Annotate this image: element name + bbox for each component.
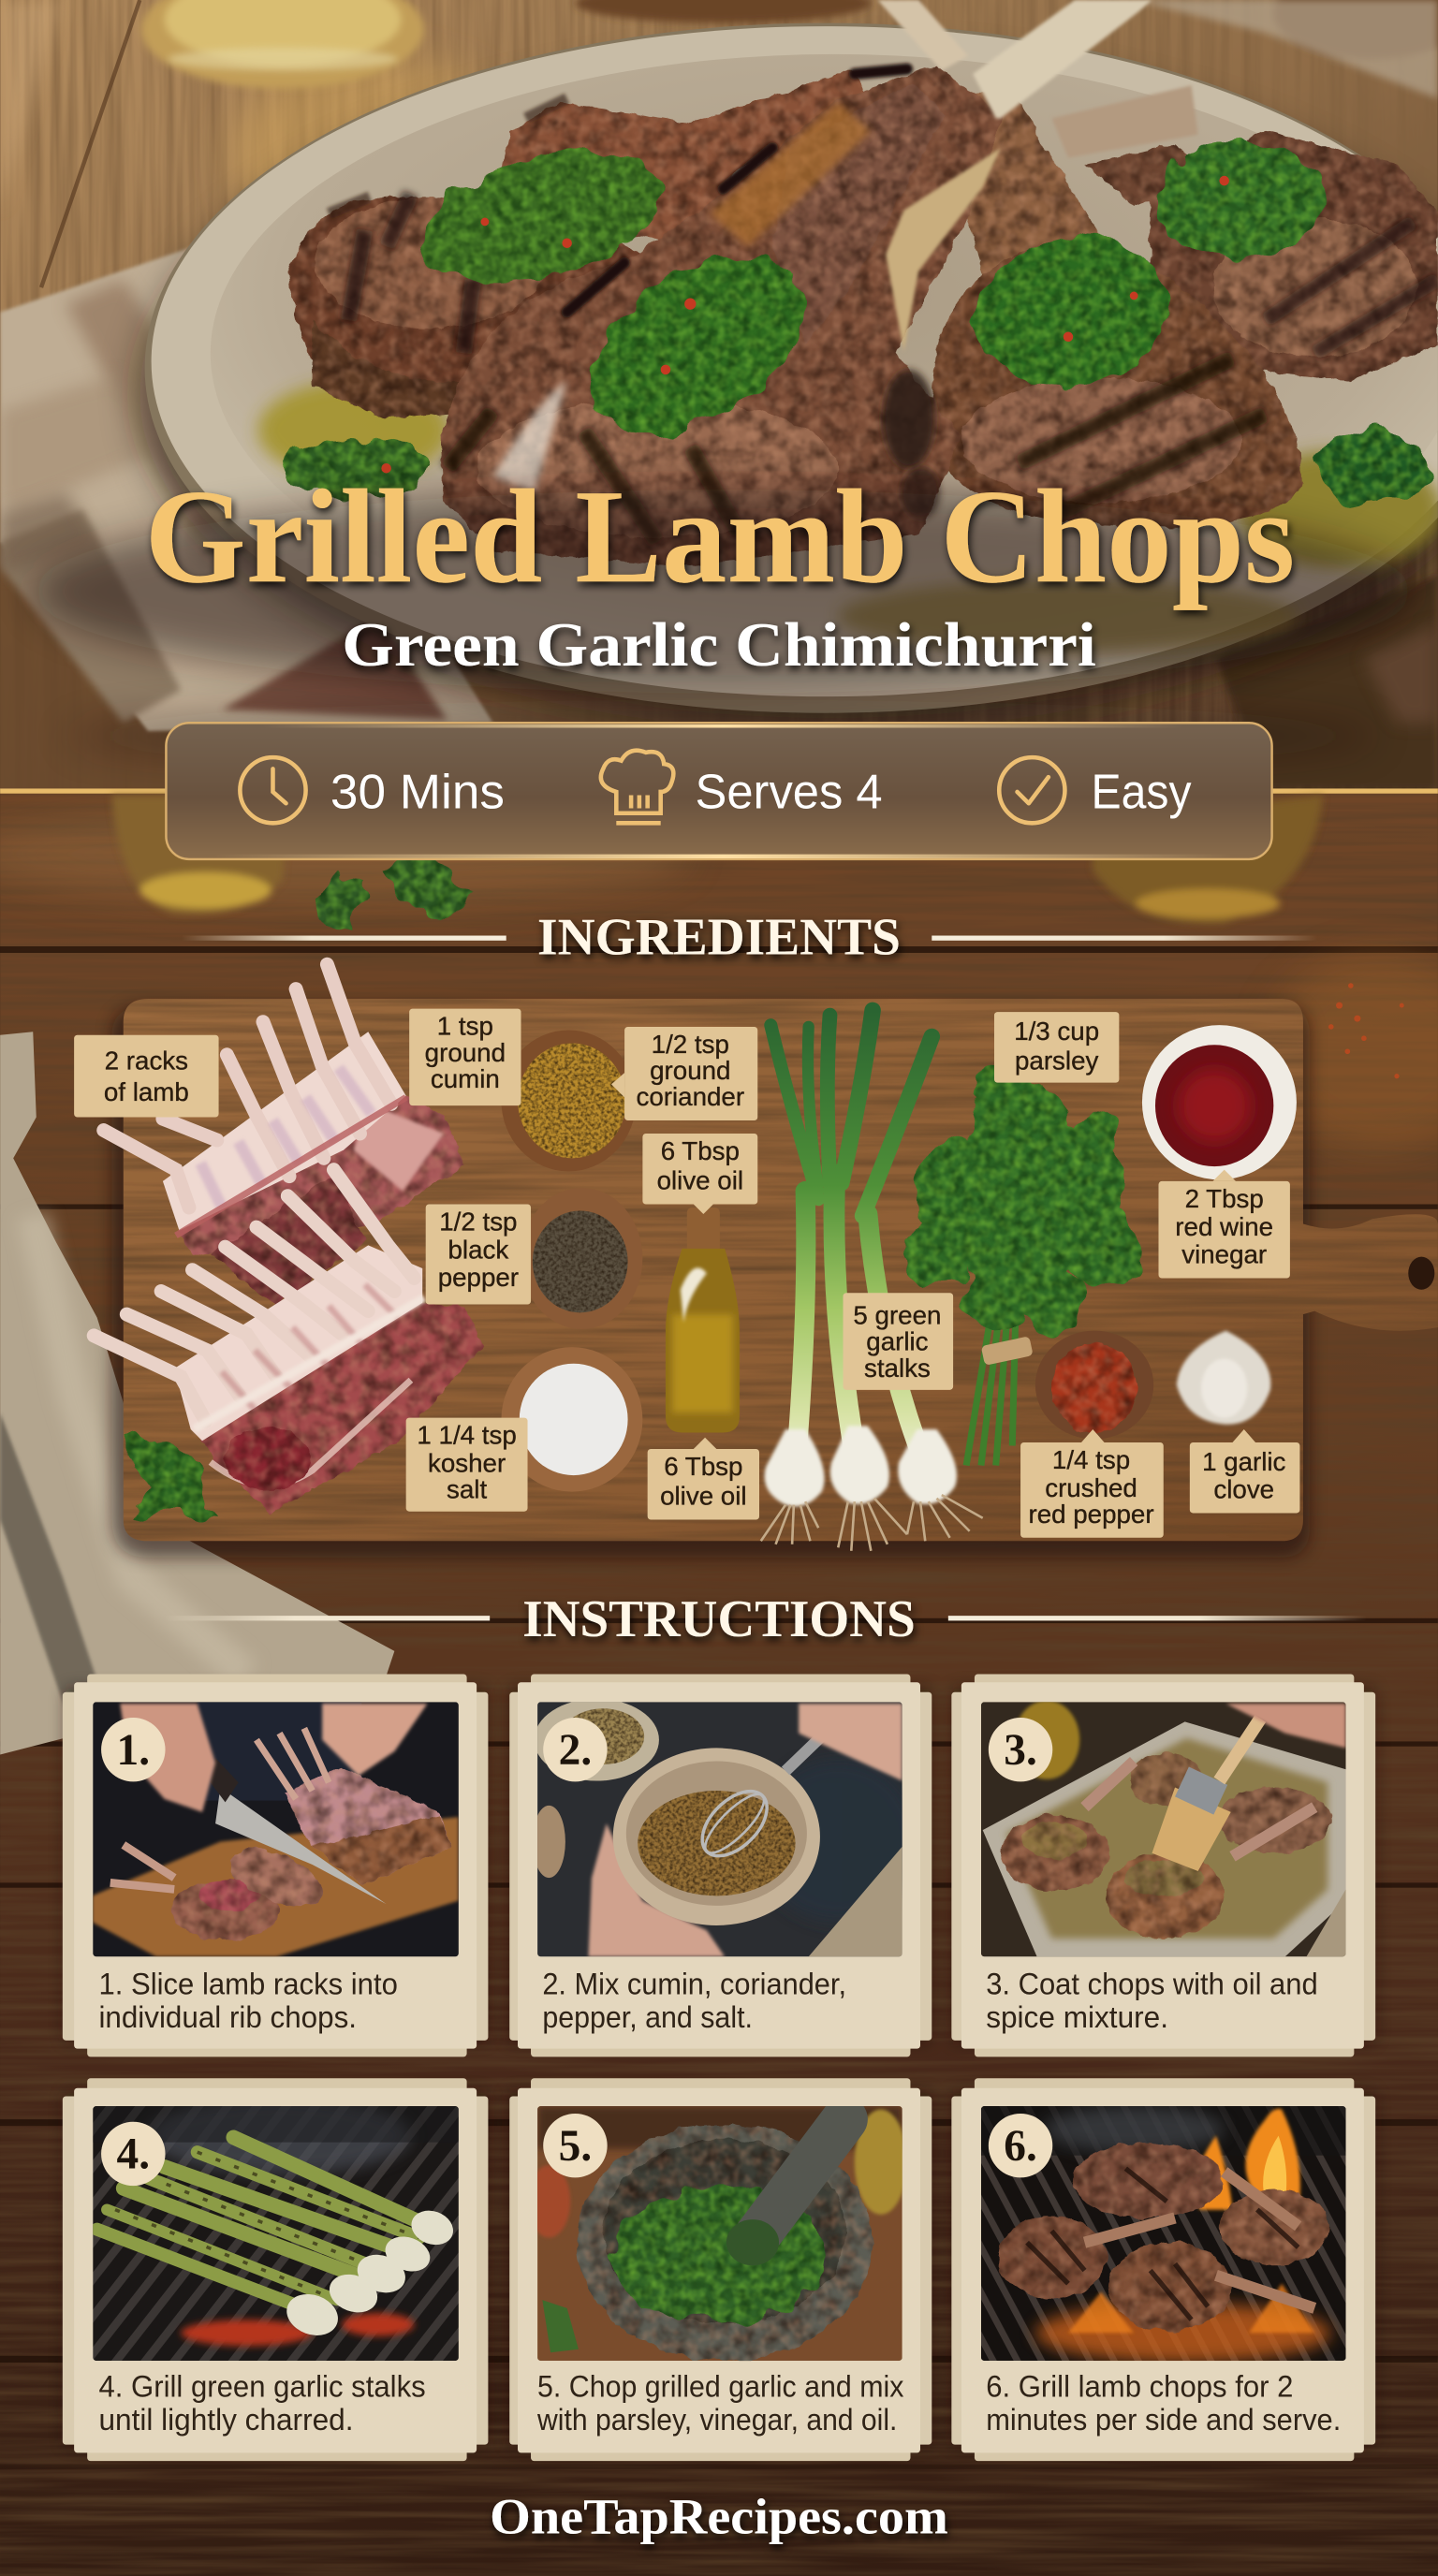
label: 1/4 tsp crushed red pepper bbox=[1020, 1429, 1164, 1538]
label: 1/2 tsp black pepper: black bbox=[448, 1235, 508, 1264]
label: 5 green garlic stalks: garlic bbox=[866, 1327, 929, 1356]
step 5 number badge bbox=[543, 2114, 608, 2177]
step 6 number badge bbox=[989, 2114, 1052, 2177]
step card 3 bbox=[951, 1674, 1375, 2056]
label: 6 Tbsp olive oil bottom: 6 Tbsp bbox=[664, 1452, 742, 1481]
icon: parsley sprig bbox=[315, 857, 477, 929]
bottom rack bbox=[94, 1170, 483, 1513]
label: 1 garlic clove: clove bbox=[1213, 1475, 1274, 1504]
label: 5 green garlic stalks: stalks bbox=[864, 1354, 931, 1383]
label: 6 Tbsp olive oil top: 6 Tbsp bbox=[661, 1136, 740, 1165]
label: 1/2 tsp ground coriander: ground bbox=[650, 1056, 730, 1085]
lamb chop back right bbox=[1051, 85, 1438, 381]
ingredient: kosher salt bowl bbox=[501, 1347, 642, 1492]
ingredient: parsley bunch bbox=[903, 1064, 1144, 1466]
label: 1/2 tsp ground coriander: coriander bbox=[637, 1082, 744, 1111]
step 1 number badge bbox=[101, 1718, 166, 1781]
label: 1/2 tsp ground coriander bbox=[611, 1027, 757, 1120]
icon: red pepper flakes bbox=[1328, 983, 1404, 1078]
ingredient: green garlic stalks bbox=[761, 1010, 983, 1551]
label: 2 Tbsp red wine vinegar: 2 Tbsp bbox=[1185, 1184, 1264, 1213]
step 2 text: 2. Mix cumin, coriander, bbox=[542, 1968, 846, 2001]
label: 1/2 tsp black pepper: 1/2 tsp bbox=[439, 1208, 517, 1237]
step 1 photo bbox=[92, 1702, 461, 1956]
label: 1/2 tsp ground coriander: 1/2 tsp bbox=[652, 1030, 729, 1059]
dark title backdrop bbox=[33, 490, 1414, 694]
ingredient labels bbox=[74, 1009, 1299, 1538]
step 2 number badge: 2. bbox=[559, 1726, 592, 1775]
step card 1 bbox=[63, 1674, 488, 2056]
step 3 number badge: 3. bbox=[1004, 1726, 1037, 1775]
ingredient: racks of lamb bbox=[94, 964, 483, 1513]
checked cloth under plate bbox=[0, 246, 1438, 790]
ingredient: black pepper bowl bbox=[521, 1188, 642, 1329]
icon: clock bbox=[240, 757, 306, 823]
label: 1/4 tsp crushed red pepper: crushed bbox=[1045, 1473, 1137, 1502]
label: 1 1/4 tsp kosher salt: kosher bbox=[428, 1449, 506, 1478]
step 3 number badge bbox=[989, 1718, 1052, 1781]
step 3 photo bbox=[981, 1701, 1346, 1956]
wooden table background bbox=[0, 788, 1438, 2576]
ingredient: crushed red pepper bowl bbox=[1035, 1331, 1153, 1439]
step 2 number badge bbox=[543, 1718, 608, 1781]
plate bbox=[139, 23, 1438, 731]
label: 2 racks of lamb: of lamb bbox=[104, 1077, 189, 1106]
label: 1 garlic clove bbox=[1190, 1429, 1299, 1513]
step 6 photo bbox=[981, 2106, 1346, 2363]
step 2 photo bbox=[533, 1699, 920, 1956]
label: 6 Tbsp olive oil top: olive oil bbox=[657, 1166, 743, 1195]
step 3 text: 3. Coat chops with oil and bbox=[986, 1968, 1318, 2001]
step 4 number badge: 4. bbox=[117, 2130, 150, 2179]
gold divider lines bbox=[0, 788, 1438, 794]
linen towel bbox=[0, 1032, 394, 1754]
step 1 text: individual rib chops. bbox=[98, 2000, 357, 2034]
step 2 text: pepper, and salt. bbox=[542, 2000, 753, 2034]
label: 1 tsp ground cumin: cumin bbox=[431, 1064, 500, 1093]
label: 1/3 cup parsley bbox=[994, 1012, 1119, 1083]
ingredient: cumin bowl bbox=[501, 1030, 636, 1171]
step 1 number badge: 1. bbox=[117, 1726, 150, 1775]
step 4 photo bbox=[92, 2097, 461, 2361]
label: 1/3 cup parsley: parsley bbox=[1015, 1046, 1098, 1076]
step 3 text: spice mixture. bbox=[986, 2000, 1168, 2034]
easy: Easy bbox=[1092, 765, 1192, 819]
label: 1/2 tsp black pepper: pepper bbox=[438, 1263, 519, 1292]
step 4 text: 4. Grill green garlic stalks bbox=[98, 2370, 426, 2404]
lamb chop back left bbox=[289, 69, 868, 419]
title: Grilled Lamb Chops bbox=[145, 462, 1295, 611]
icon: chef hat bbox=[601, 751, 673, 823]
label: 1/2 tsp black pepper bbox=[426, 1204, 531, 1305]
ingredient: olive oil bottle bbox=[666, 1208, 740, 1432]
label: 2 racks of lamb bbox=[74, 1035, 219, 1117]
step 5 photo bbox=[528, 2106, 907, 2361]
label: 1 garlic clove: 1 garlic bbox=[1202, 1447, 1286, 1476]
lamb chop right bbox=[877, 0, 1303, 527]
label: 2 racks of lamb: 2 racks bbox=[105, 1046, 188, 1076]
step 4 text: until lightly charred. bbox=[98, 2403, 353, 2437]
step 6 number badge: 6. bbox=[1004, 2122, 1037, 2171]
label: 1/4 tsp crushed red pepper: red pepper bbox=[1028, 1500, 1154, 1529]
step 1 text: 1. Slice lamb racks into bbox=[98, 1968, 398, 2001]
label: 1/4 tsp crushed red pepper: 1/4 tsp bbox=[1052, 1445, 1130, 1474]
instructions heading: INSTRUCTIONS bbox=[522, 1590, 916, 1648]
label: 2 Tbsp red wine vinegar: red wine bbox=[1175, 1212, 1273, 1241]
label: 2 Tbsp red wine vinegar bbox=[1158, 1170, 1290, 1278]
label: 5 green garlic stalks bbox=[844, 1293, 953, 1390]
label: 1 tsp ground cumin bbox=[409, 1009, 521, 1105]
step card 2 bbox=[509, 1674, 932, 2056]
label: 6 Tbsp olive oil bottom bbox=[648, 1438, 759, 1519]
footer website: OneTapRecipes.com bbox=[490, 2488, 948, 2544]
hero photo: plated lamb chops bbox=[0, 0, 1438, 790]
label: 1 1/4 tsp kosher salt: 1 1/4 tsp bbox=[417, 1421, 517, 1450]
step 5 number badge: 5. bbox=[559, 2122, 592, 2171]
serves 4: Serves 4 bbox=[696, 765, 883, 819]
ingredient: red wine vinegar bowl bbox=[1142, 1025, 1297, 1179]
hero wood table bbox=[0, 0, 1438, 790]
ingredients heading: INGREDIENTS bbox=[537, 909, 901, 967]
lamb chop front bbox=[441, 0, 1152, 567]
instructions heading bbox=[165, 1590, 1367, 1648]
label: 1 tsp ground cumin: 1 tsp bbox=[437, 1012, 493, 1041]
info bar bbox=[166, 723, 1272, 859]
label: 1 1/4 tsp kosher salt: salt bbox=[447, 1475, 487, 1504]
label: 2 Tbsp red wine vinegar: vinegar bbox=[1181, 1240, 1267, 1269]
subtitle: Green Garlic Chimichurri bbox=[342, 611, 1096, 680]
icon: parsley leaf lower left bbox=[125, 1432, 213, 1518]
ingredients heading bbox=[181, 909, 1318, 967]
label: 5 green garlic stalks: 5 green bbox=[853, 1301, 941, 1330]
icon: check mark bbox=[999, 757, 1064, 823]
top rack bbox=[104, 964, 465, 1257]
label: 6 Tbsp olive oil bottom: olive oil bbox=[660, 1482, 747, 1511]
step 6 text: minutes per side and serve. bbox=[986, 2403, 1341, 2437]
step 5 text: with parsley, vinegar, and oil. bbox=[536, 2403, 897, 2437]
step 4 number badge bbox=[101, 2122, 166, 2186]
30 mins: 30 Mins bbox=[330, 765, 505, 819]
cutting board bbox=[111, 999, 1438, 1558]
chimichurri sauce bbox=[283, 127, 1428, 507]
icon: glass of oil bbox=[141, 0, 424, 89]
label: 1 tsp ground cumin: ground bbox=[425, 1038, 506, 1067]
label: 6 Tbsp olive oil top bbox=[642, 1134, 757, 1214]
step card 5 bbox=[509, 2078, 932, 2461]
step card 6 bbox=[951, 2078, 1375, 2461]
step 6 text: 6. Grill lamb chops for 2 bbox=[986, 2370, 1293, 2404]
olive oil pools bbox=[258, 381, 1438, 652]
step card 4 bbox=[63, 2078, 488, 2461]
ingredient: garlic clove bbox=[1177, 1331, 1270, 1425]
step 5 text: 5. Chop grilled garlic and mix bbox=[537, 2370, 903, 2404]
label: 1/3 cup parsley: 1/3 cup bbox=[1014, 1017, 1099, 1046]
label: 1 1/4 tsp kosher salt bbox=[406, 1418, 528, 1512]
glasses of oil behind info bar bbox=[111, 795, 1323, 924]
